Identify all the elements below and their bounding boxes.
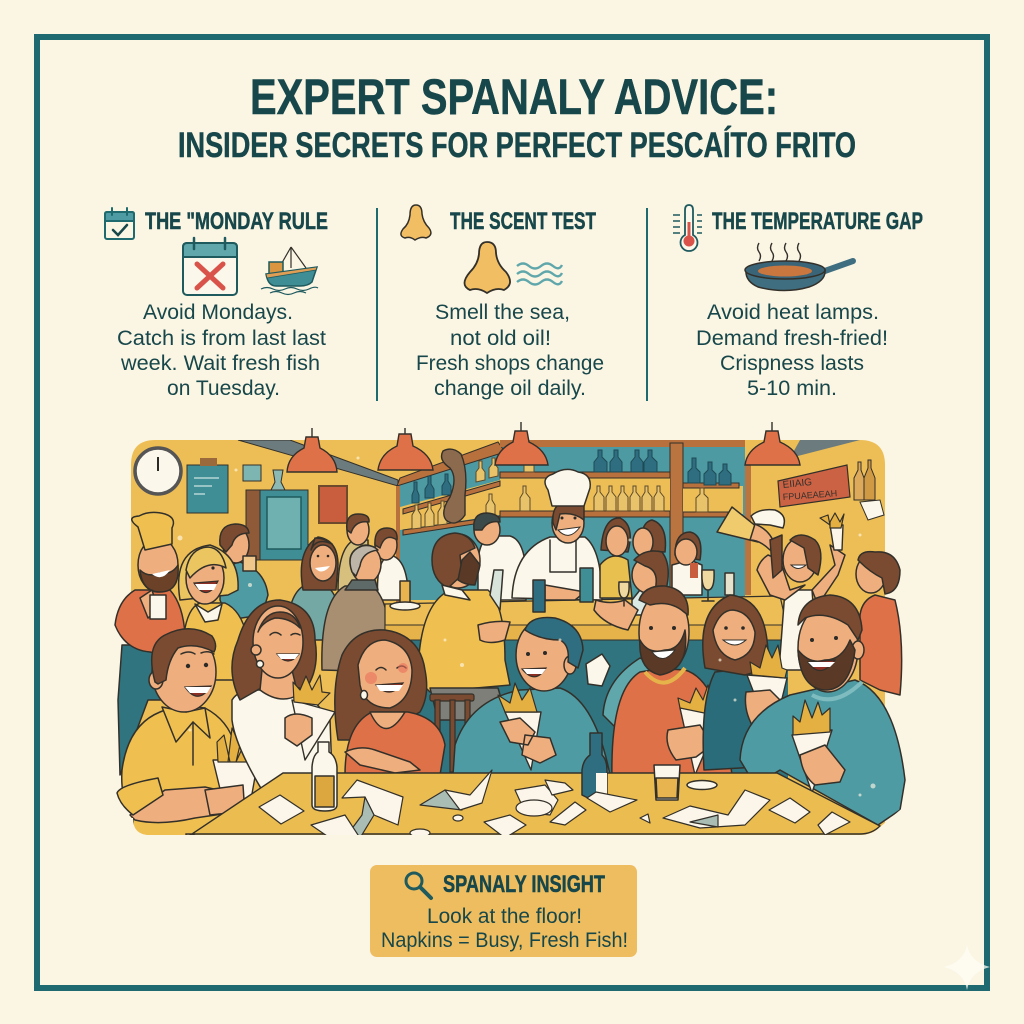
clock [135,448,181,494]
heading: temperature gap: THE TEMPERATURE GAP [712,208,923,235]
body text: Monday rule: week. Wait fresh fish [120,352,320,375]
divider [646,208,648,401]
body text: scent test [416,301,604,400]
body text: temperature gap: Crispness lasts [720,352,864,375]
icon: big nose [464,242,510,293]
wall note [243,465,261,481]
dark bottle [582,733,607,800]
divider [376,208,378,401]
body text: scent test: Fresh shops change [416,352,604,375]
hanging napkin at bar [586,654,610,686]
person: woman at right [856,552,902,695]
person: woman in green [288,537,342,640]
panel: the Monday rule [105,208,328,400]
panel: the scent test [401,205,604,400]
callout text: Napkins = Busy, Fresh Fish! [381,929,628,952]
table [186,773,880,838]
person: old man from behind [322,545,392,672]
crumpled napkins [259,770,850,838]
body text: Monday rule: Avoid Mondays. [143,301,293,324]
icon: small calendar check [105,208,134,239]
body text: temperature gap: Avoid heat lamps. [707,301,879,324]
person: chef left [115,512,185,775]
person: women behind bar [600,518,702,598]
wall sign [778,465,850,507]
beer glass on counter [390,581,420,610]
title: EXPERT SPANALY ADVICE: [250,69,778,125]
paint speckles [178,444,876,796]
sparkle [944,945,990,990]
wooden beams [396,440,751,606]
bottle of oil [312,742,337,811]
panel: the temperature gap [673,205,923,400]
icon: steam [758,243,800,261]
body text: temperature gap: 5-10 min. [747,377,837,400]
wine bottles on wall [854,460,884,520]
icon: frying pan [745,261,853,290]
body text: Monday rule [117,301,326,400]
callout text: Look at the floor! [427,905,582,928]
body text: Monday rule: Catch is from last last [117,327,326,350]
person: head chef [512,469,602,612]
hanging ham [442,449,466,523]
pendant lamps [287,422,800,472]
person: woman in white [232,600,335,790]
fridge [246,470,308,560]
icon: small nose [401,205,431,240]
person: man in red sweater [612,586,732,785]
yellow shelf bays [400,472,743,535]
bar back wall [398,445,745,600]
body text: scent test: not old oil! [450,327,551,350]
person: man in teal sweater [453,618,610,775]
person: man in white [375,528,408,600]
person: woman in dark teal [703,595,795,770]
bar counter [384,596,783,630]
body text: Monday rule: on Tuesday. [167,377,280,400]
person: bearded man at bar from behind [418,533,510,720]
ceiling beam [238,440,398,486]
wall menu [187,458,228,513]
icon: magnifying glass [406,873,431,898]
body text: scent test: change oil daily. [434,377,586,400]
icon: sea waves [517,264,562,284]
person: cheering man in tank top [717,507,845,670]
lower bar front [378,638,788,778]
red poster [319,486,347,523]
person: teal sweater man at back [220,524,268,620]
callout: Spanaly insight [370,865,637,957]
heading: Monday rule: THE "MONDAY RULE [145,208,328,235]
person: man at bar in profile [594,551,672,630]
person: man in yellow polo [117,629,265,840]
icon: thermometer [673,205,702,251]
wall sign: EIIAIG [782,477,813,491]
glass of beer [654,765,717,800]
wine glasses [619,570,734,606]
body text: temperature gap: Demand fresh-fried! [696,327,888,350]
title [178,69,856,165]
callout text [381,905,628,952]
bar stool [430,694,474,772]
person: man behind old man [338,514,369,590]
person: bearded man in teal sweater [740,595,905,825]
person: blond woman [179,545,250,680]
callout heading: SPANALY INSIGHT [443,871,605,898]
wall [131,440,885,835]
teal person behind table [602,657,648,727]
person: bartender [474,513,526,600]
body text: temperature gap [696,301,888,400]
heading: scent test: THE SCENT TEST [450,208,596,235]
icon: fishing boat [261,247,318,294]
shelf bottles [412,450,731,503]
body text: scent test: Smell the sea, [435,301,570,324]
illustration: crowded tapas bar [115,440,905,840]
wall sign: FPUAEAEAH [782,488,838,502]
icon: calendar crossed out [183,238,237,295]
person: laughing woman in coral [335,630,445,775]
